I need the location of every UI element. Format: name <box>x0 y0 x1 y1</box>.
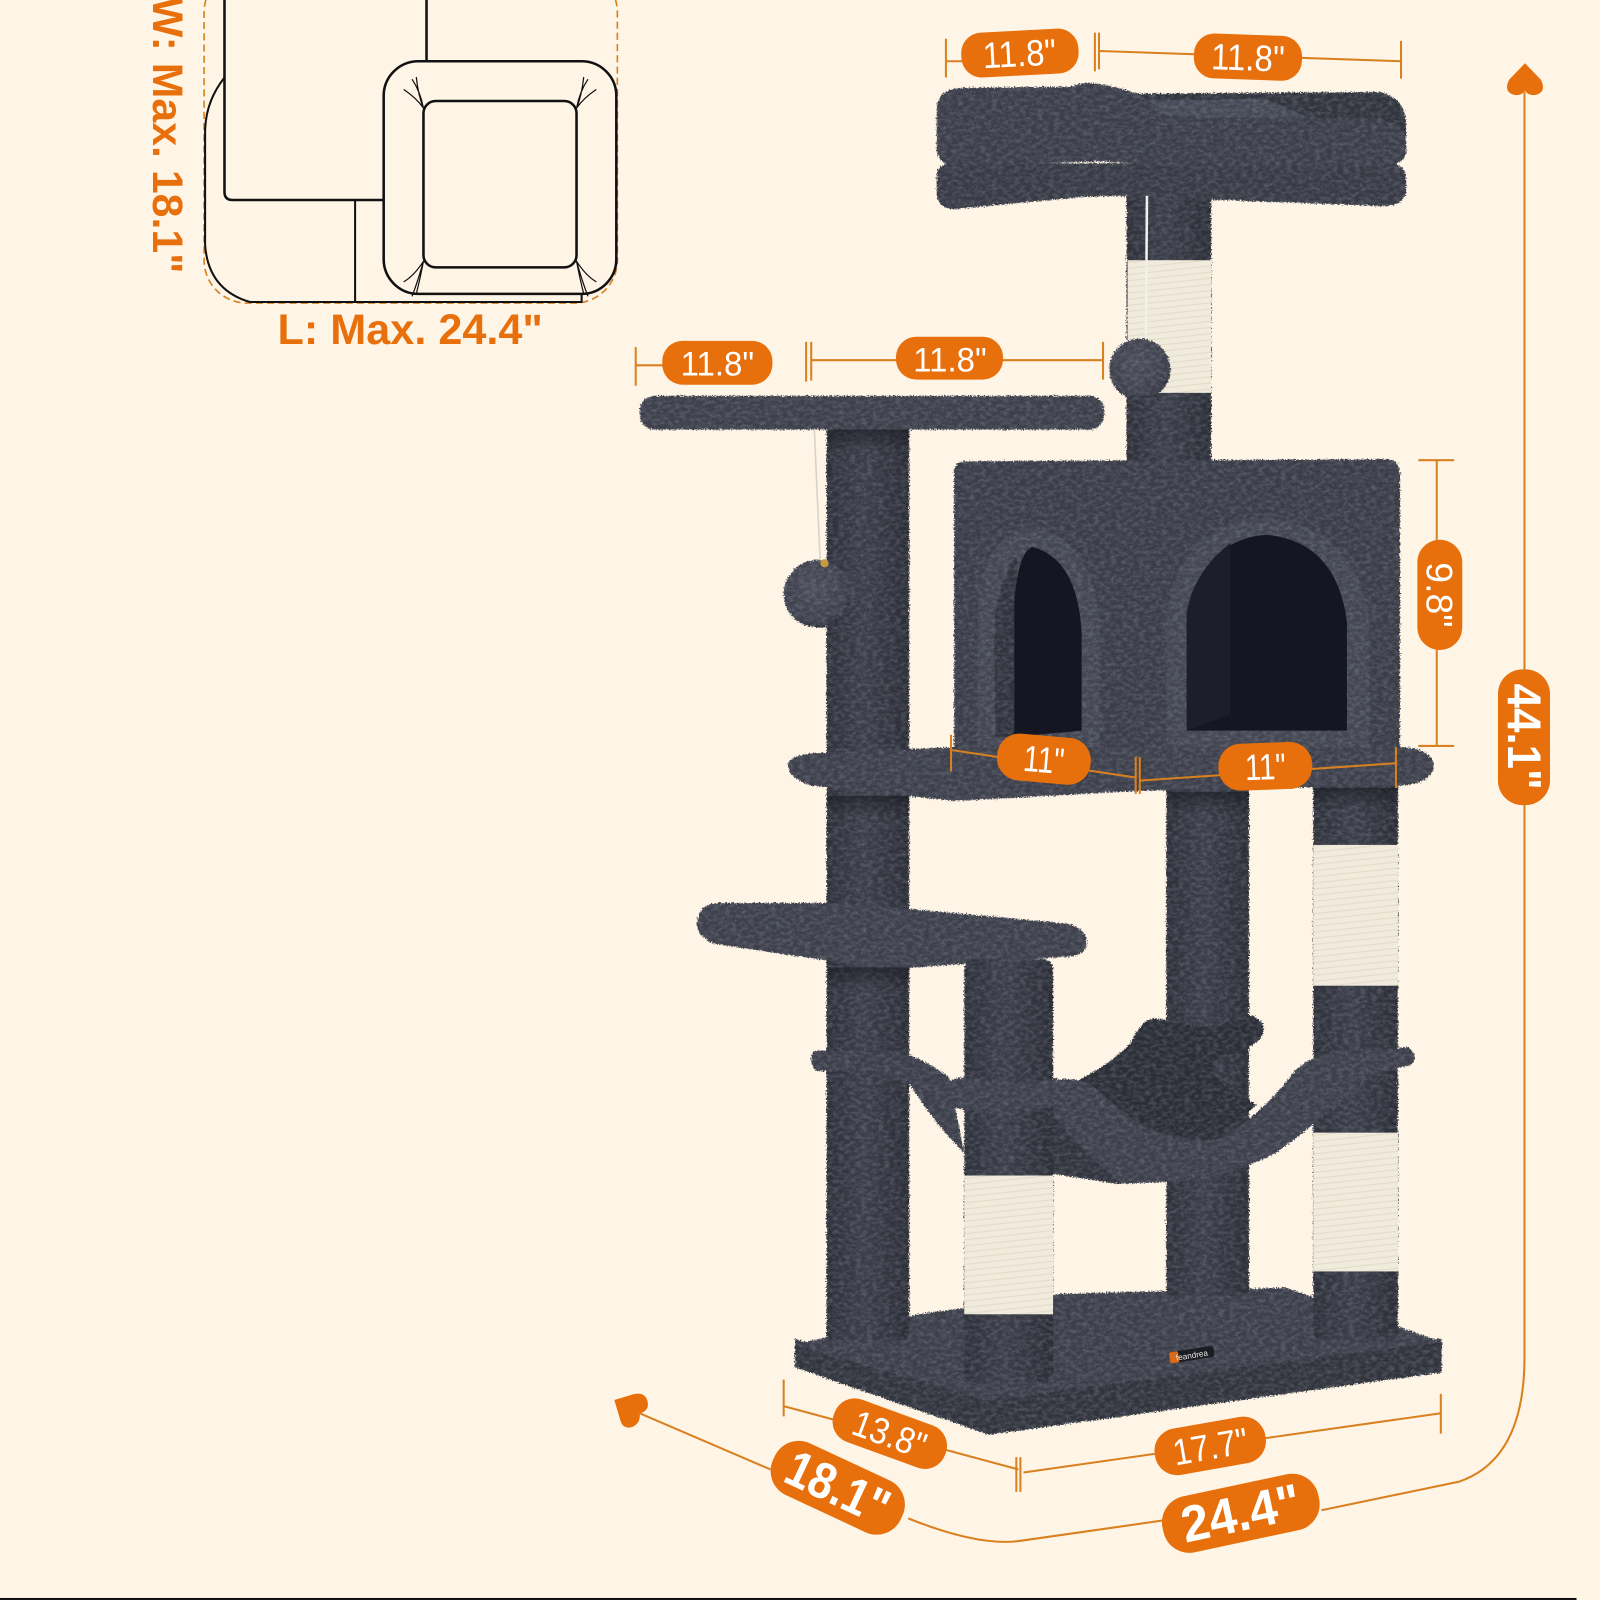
pill: 17.7: 17.7" <box>1170 1420 1251 1473</box>
overall height and length arrow <box>908 92 1524 1542</box>
hammock front band <box>1051 1047 1415 1184</box>
pill: top right 11.8: 11.8" <box>1211 36 1285 80</box>
pill: 9.8 <box>1417 540 1462 650</box>
back of hammock <box>1077 1015 1264 1143</box>
top post with sisal <box>1127 194 1211 464</box>
pill: 13.8 <box>827 1392 953 1475</box>
middle dimension lines <box>636 342 1103 386</box>
pill: house right 11 <box>1218 741 1313 791</box>
width label: W: Max. 18.1" <box>143 0 191 273</box>
pill: 17.7 <box>1151 1413 1270 1479</box>
top perch string <box>1146 196 1147 347</box>
pill: right platform 11.8 <box>896 337 1003 380</box>
middle platform <box>788 747 1434 801</box>
pill: left platform 11.8: 11.8" <box>681 346 754 384</box>
cat bed line drawing <box>384 61 616 296</box>
top hanging ball <box>1109 339 1170 400</box>
cat tree <box>640 83 1442 1435</box>
left platform <box>640 396 1104 430</box>
dashed max size outline <box>204 0 617 303</box>
sofa and cat bed sketch <box>204 0 617 303</box>
base <box>795 1288 1442 1435</box>
right doorway <box>1166 518 1369 750</box>
pill: 44.1: 44.1" <box>1498 684 1550 790</box>
house width dimension lines <box>951 735 1396 794</box>
pill: 24.4: 24.4" <box>1176 1473 1306 1554</box>
pill: 9.8: 9.8" <box>1419 562 1460 628</box>
pill: 18.1: 18.1" <box>777 1439 899 1536</box>
pill: right platform 11.8: 11.8" <box>913 341 987 379</box>
pill: top left 11.8 <box>960 28 1080 79</box>
pill: left platform 11.8 <box>662 341 772 385</box>
pill: top left 11.8: 11.8" <box>982 31 1057 76</box>
top perch bed <box>937 83 1406 209</box>
condo house <box>954 459 1400 757</box>
hammock underside <box>1051 1092 1286 1184</box>
pill: house left 11 <box>995 732 1093 787</box>
brand tag: feandrea <box>1175 1349 1209 1363</box>
length label: L: Max. 24.4" <box>278 306 543 354</box>
house height dimension lines <box>1418 460 1454 746</box>
left long post <box>827 427 909 1340</box>
brand tag <box>1169 1346 1215 1364</box>
pill: 13.8: 13.8" <box>847 1402 932 1467</box>
left hammock band <box>811 1051 964 1153</box>
left hanging ball <box>784 559 851 628</box>
pill: house right 11: 11" <box>1244 746 1286 788</box>
pill: top right 11.8 <box>1193 33 1303 81</box>
step platform <box>697 903 1087 969</box>
left doorway <box>978 529 1100 750</box>
depth arrow line <box>640 1413 770 1469</box>
pill: house left 11: 11" <box>1022 738 1066 782</box>
short post with sisal <box>944 959 1061 1383</box>
left hanging string <box>814 429 820 567</box>
base dimension lines <box>784 1380 1441 1492</box>
hammock <box>811 1047 1415 1184</box>
platform shadows <box>828 788 1398 818</box>
step platform shadow <box>828 967 909 990</box>
sofa line drawing <box>205 0 582 302</box>
center post <box>1166 786 1249 1296</box>
right post with sisal <box>1313 781 1398 1340</box>
top dimension lines <box>946 33 1401 79</box>
arrow head: left heart <box>614 1394 648 1428</box>
arrow head: top heart <box>1507 63 1543 95</box>
